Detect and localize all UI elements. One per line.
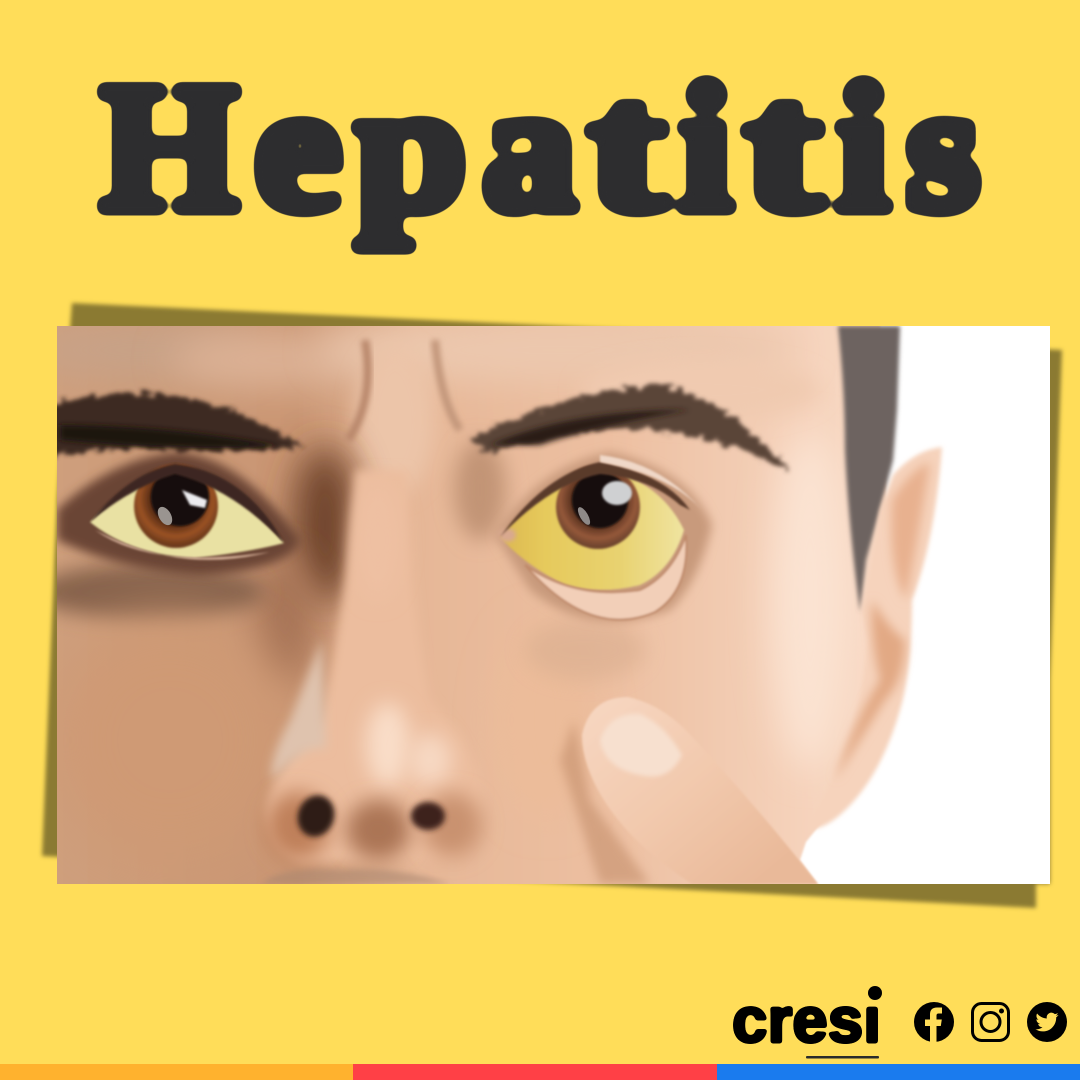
face skin [20,316,890,890]
nostrils [292,790,340,842]
finger [560,697,818,884]
title: t [588,45,666,249]
title: i [836,45,890,249]
logo underline [806,1056,879,1058]
left eyebrow [50,393,305,458]
logo i dot [868,986,882,1000]
ear [806,447,942,829]
upper eyelid fold [598,454,695,503]
icon: facebook [914,1002,954,1042]
pulled lower eyelid [525,535,686,620]
title: e [254,45,342,249]
title: p [355,45,467,249]
photo drop shadow [42,303,1062,908]
title: t [744,45,822,249]
title: s [906,45,980,249]
photo: jaundiced eyes close-up [20,316,1050,890]
stubble below nose [262,869,450,884]
forehead wrinkles [348,340,368,440]
bottom colour bar [0,1064,1080,1080]
right eyebrow [470,384,790,472]
fingernail [600,714,682,777]
title: i [679,45,733,249]
photo white background [798,326,1050,884]
logo i dot mask [862,982,886,1004]
logo: cresi: cresi [732,984,881,1056]
title: a [482,45,577,249]
icon: twitter [1027,1002,1067,1042]
title [100,45,980,249]
right eye [495,452,712,621]
hair [838,326,900,612]
title: H [100,45,239,249]
left eye [57,452,300,575]
nose side highlight [271,640,326,780]
icon: instagram [972,1004,1008,1040]
inner eye corner [498,528,516,542]
nose [266,470,482,862]
